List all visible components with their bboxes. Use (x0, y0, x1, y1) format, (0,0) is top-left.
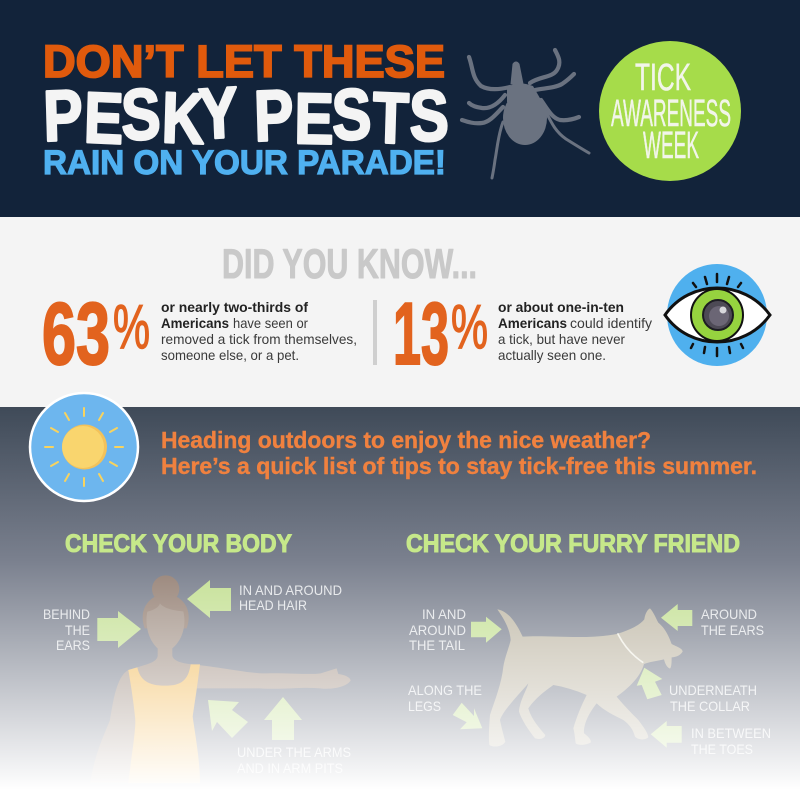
arrow: under the arm diagonal (208, 700, 248, 738)
label: underneath the collar: UNDERNEATH (669, 682, 757, 698)
icon: sun (30, 393, 138, 501)
arrow: tail (471, 617, 502, 643)
label: head hair (239, 582, 342, 613)
text block: 13 percent description: could identify (570, 315, 652, 331)
stat: 63 percent: 63 (42, 284, 110, 383)
text block: 13 percent description (498, 299, 652, 363)
label: behind the ears: BEHIND (43, 606, 90, 622)
stat: 13 percent: % (451, 293, 488, 362)
label: under the arms (237, 744, 351, 776)
text block: 63 percent description: someone else, or a pet. (161, 347, 299, 363)
label: in between the toes (691, 725, 771, 757)
panel: check your body (43, 530, 351, 783)
arrow: behind the ears (97, 611, 141, 648)
panel: tips background (0, 407, 800, 800)
badge: tick awareness week (599, 41, 741, 181)
text block: 13 percent description: Americans (498, 315, 567, 331)
headline line 2: PESKY PESTS (42, 71, 449, 159)
arrow: collar (637, 668, 662, 699)
label: tail: AROUND (409, 622, 466, 638)
text block: 13 percent description: actually seen one. (498, 347, 606, 363)
label: underneath the collar (669, 682, 757, 714)
label: behind the ears: EARS (56, 637, 90, 653)
label: along the legs (408, 682, 482, 714)
label: around the ears: THE EARS (701, 622, 764, 638)
stat: 63 percent: % (113, 293, 150, 362)
label: around the ears (701, 606, 764, 638)
figure: woman (90, 575, 351, 783)
headline line 3: RAIN ON YOUR PARADE! (43, 144, 446, 182)
arrow: legs (453, 703, 482, 729)
header panel (0, 0, 800, 217)
label: tail: THE TAIL (409, 637, 465, 653)
label: along the legs: LEGS (408, 698, 441, 714)
label: head hair: IN AND AROUND (239, 582, 342, 598)
label: underneath the collar: THE COLLAR (670, 698, 750, 714)
label: tail: IN AND (422, 606, 466, 622)
arrow: under the arm up (264, 697, 302, 740)
headline line 1: DON’T LET THESE (43, 36, 445, 87)
heading: check your furry friend: CHECK YOUR FURRY FRIEND (406, 530, 740, 558)
text block: 13 percent description: a tick, but have never (498, 331, 625, 347)
text block: tips intro (161, 427, 757, 479)
stat: 13 percent: 13 (393, 284, 449, 383)
text block: tips intro: Here’s a quick list of tips to stay tick-free this summer. (161, 453, 757, 479)
text block: 63 percent description (161, 299, 357, 363)
icon: eye (665, 264, 770, 366)
label: in between the toes: IN BETWEEN (691, 725, 771, 741)
text block: 63 percent description: removed a tick from themselves, (161, 331, 357, 347)
text block: 63 percent description: have seen or (233, 315, 308, 331)
heading: check your body: CHECK YOUR BODY (65, 530, 292, 558)
label: behind the ears (43, 606, 90, 653)
label: in between the toes: THE TOES (691, 741, 753, 757)
figure: dog (489, 608, 683, 747)
arrow: toes (651, 721, 682, 748)
badge: tick awareness week: TICK (635, 57, 691, 99)
text block: 13 percent description: or about one-in-ten (498, 299, 624, 315)
label: along the legs: ALONG THE (408, 682, 482, 698)
arrow: ears (661, 604, 692, 631)
label: around the ears: AROUND (701, 606, 757, 622)
text block: 63 percent description: Americans (161, 315, 229, 331)
label: under the arms: AND IN ARM PITS (237, 760, 343, 776)
label: tail (409, 606, 466, 653)
label: behind the ears: THE (65, 622, 90, 638)
badge: tick awareness week: WEEK (643, 125, 699, 167)
text block: 63 percent description: or nearly two-thirds of (161, 299, 308, 315)
panel: check your furry friend (406, 530, 771, 757)
arrow: head hair (187, 580, 231, 618)
label: under the arms: UNDER THE ARMS (237, 744, 351, 760)
label: head hair: HEAD HAIR (239, 597, 307, 613)
icon: tick (462, 50, 589, 178)
text block: tips intro: Heading outdoors to enjoy the nice weather? (161, 427, 651, 453)
panel: did you know (0, 217, 800, 407)
heading: did you know: DID YOU KNOW... (222, 240, 477, 287)
